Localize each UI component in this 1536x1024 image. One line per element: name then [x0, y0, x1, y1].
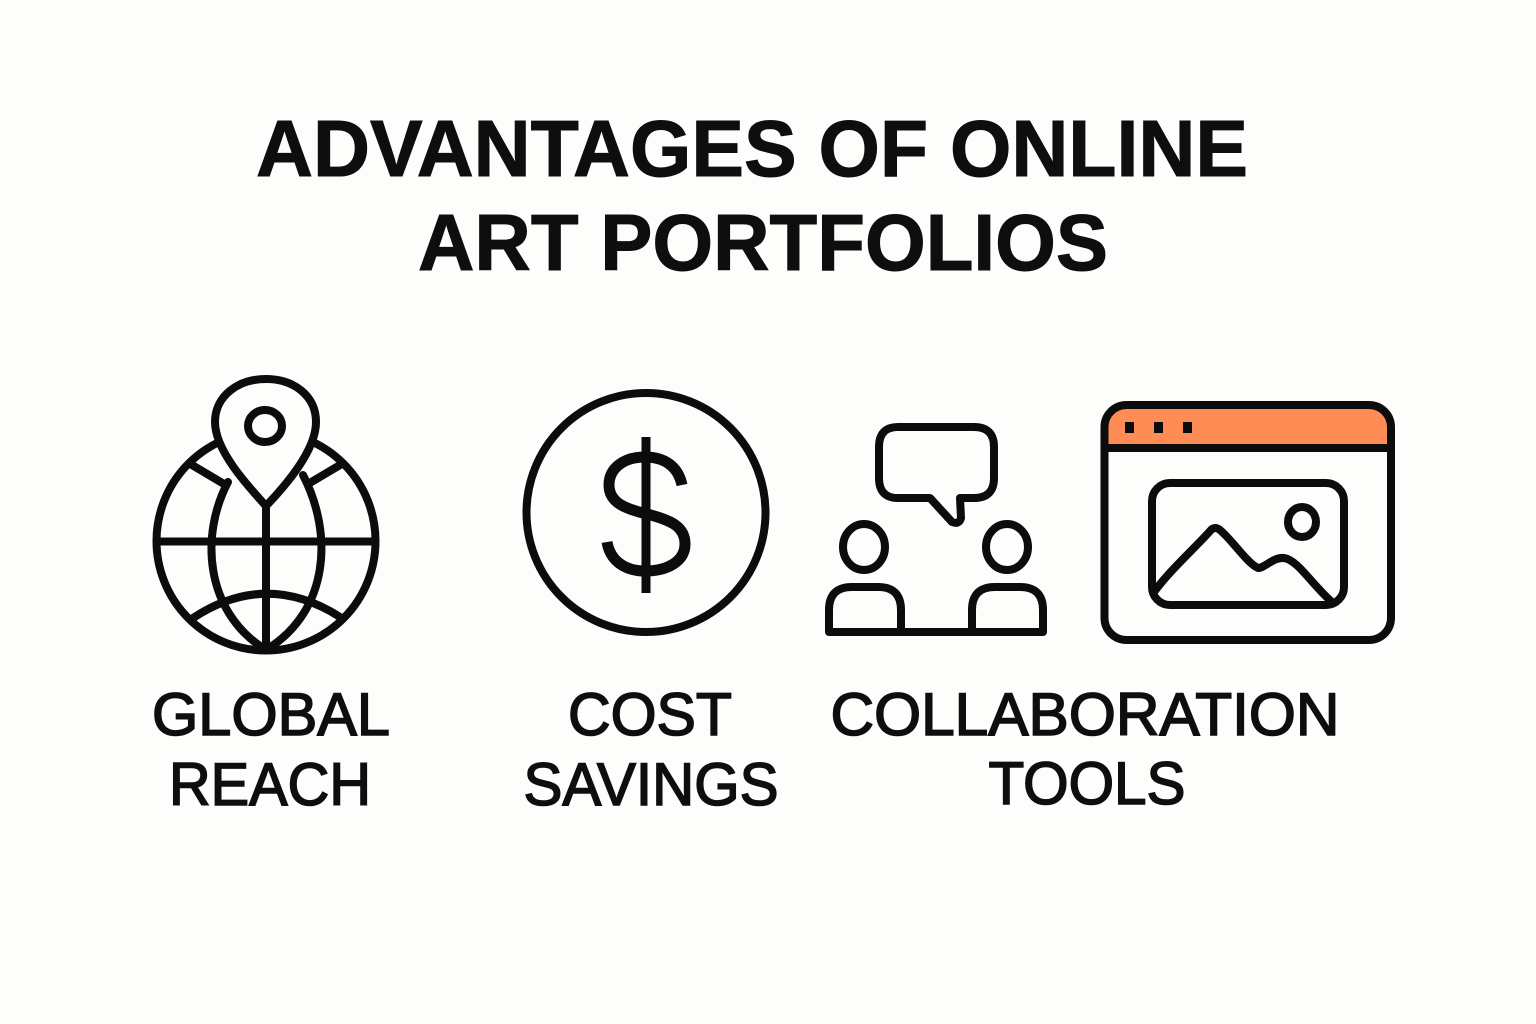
label: collaboration tools: COLLABORATION	[830, 681, 1340, 748]
mountains	[1154, 528, 1333, 603]
pin centre ring	[248, 410, 282, 442]
sun	[1288, 507, 1316, 537]
label: collaboration tools: TOOLS	[988, 750, 1186, 817]
icon: browser window with image	[1104, 405, 1391, 640]
icon: globe with location pin	[156, 379, 376, 650]
label: cost savings: COST	[568, 681, 732, 748]
dollar bar	[642, 437, 650, 593]
browser frame	[1104, 405, 1391, 640]
left person body	[829, 587, 901, 631]
browser title bar	[1107, 408, 1389, 446]
person head	[843, 524, 885, 570]
coin outline	[526, 393, 766, 632]
right person body	[972, 587, 1043, 631]
window dots	[1125, 422, 1192, 433]
label: global reach: REACH	[169, 751, 371, 818]
title	[256, 104, 1248, 287]
label: collaboration tools	[830, 681, 1340, 817]
image frame	[1152, 483, 1344, 605]
label: global reach	[152, 681, 390, 818]
icon: two people with speech bubble	[829, 427, 1043, 632]
icon: dollar coin	[526, 393, 766, 632]
speech bubble	[879, 427, 994, 523]
label: cost savings	[524, 681, 778, 818]
label: cost savings: SAVINGS	[524, 751, 778, 818]
title: ART PORTFOLIOS	[418, 198, 1108, 287]
label: global reach: GLOBAL	[152, 681, 390, 748]
divider	[1107, 444, 1389, 452]
location pin	[215, 379, 316, 506]
title: ADVANTAGES OF ONLINE	[256, 104, 1248, 193]
second person head	[986, 524, 1028, 570]
table line	[829, 628, 1043, 636]
dollar S curve	[607, 457, 685, 571]
